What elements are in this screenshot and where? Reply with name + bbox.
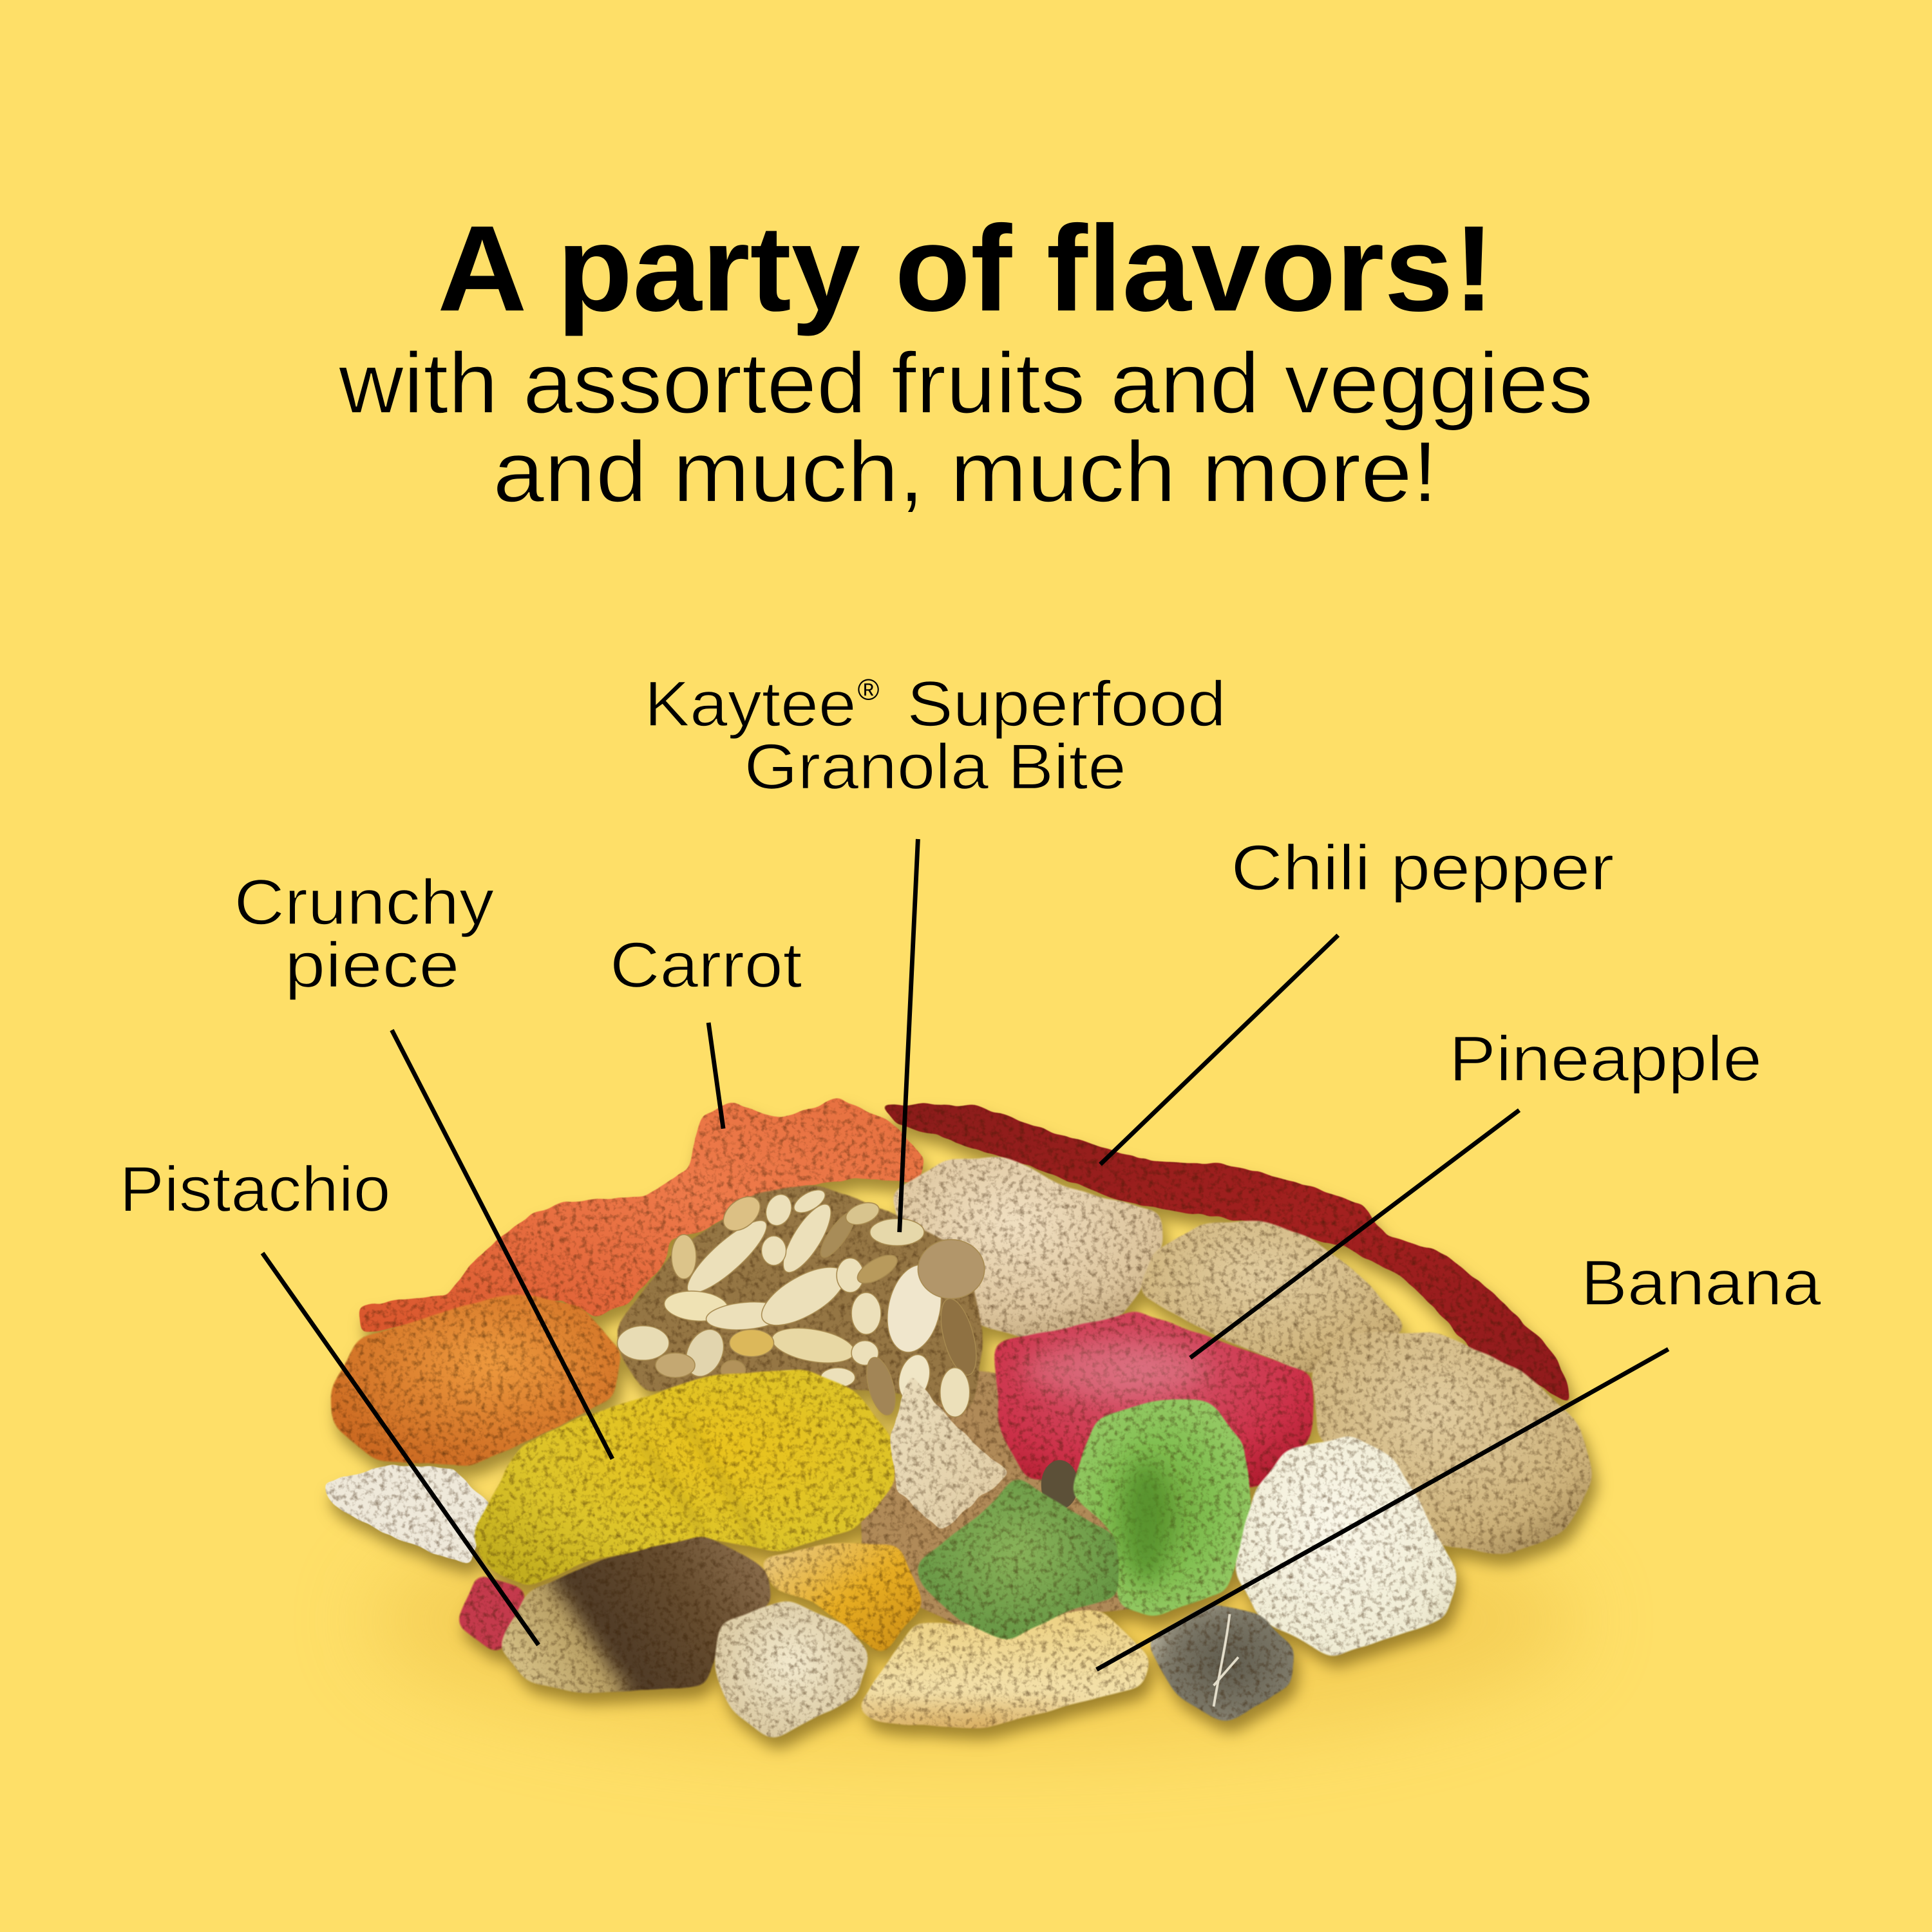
beige nut top (889, 1158, 1163, 1338)
label: carrot: Carrot (610, 930, 802, 1001)
pistachio (499, 1535, 773, 1693)
green ring body (1071, 1399, 1252, 1616)
white shell left (324, 1465, 490, 1565)
food pile illustration (324, 1099, 1593, 1750)
granola seeds (618, 1185, 985, 1418)
corn kernel (759, 1544, 924, 1655)
leader: pineapple (1190, 1110, 1519, 1358)
banana chip (857, 1609, 1151, 1727)
subtitle line 1: with assorted fruits and veggies (338, 336, 1593, 431)
label: banana: Banana (1581, 1247, 1822, 1319)
white yogurt piece (1235, 1435, 1457, 1657)
carrot (360, 1099, 924, 1333)
green crunchy piece (916, 1476, 1117, 1641)
label: granola bite: Granola Bite (744, 731, 1126, 802)
food pieces (324, 1099, 1593, 1740)
crunchy body (473, 1370, 895, 1587)
label: granola bite: ® (858, 673, 880, 706)
seed body (1147, 1603, 1294, 1723)
label: crunchy piece: piece (285, 930, 460, 1001)
label: pineapple: Pineapple (1449, 1023, 1762, 1095)
granola base (616, 1184, 982, 1411)
small red piece (456, 1573, 529, 1655)
granola bite (616, 1184, 985, 1418)
leader: pistachio (263, 1253, 538, 1645)
label: granola bite: Superfood (907, 668, 1226, 740)
pineapple frosted patch (1023, 1343, 1208, 1397)
pineapple body (996, 1311, 1311, 1487)
chili pepper (881, 1105, 1573, 1405)
orange puff (330, 1294, 621, 1465)
striped seed (1147, 1603, 1294, 1723)
round nut bottom (714, 1600, 869, 1740)
ground shadow (370, 1491, 1577, 1750)
title: A party of flavors! (437, 201, 1495, 337)
leader lines (263, 839, 1669, 1669)
leader: carrot (708, 1023, 723, 1129)
callout labels (120, 668, 1822, 1319)
leader: banana (1097, 1349, 1669, 1669)
peanut right (1311, 1333, 1593, 1555)
label: granola bite (645, 668, 1226, 802)
peanut upper right (1139, 1221, 1407, 1374)
dark seed behind green (1041, 1460, 1078, 1510)
pineapple (996, 1311, 1311, 1487)
label: chili pepper: Chili pepper (1231, 832, 1614, 904)
seed markings (1214, 1614, 1238, 1707)
green ring hollow (1121, 1460, 1171, 1584)
heading block (338, 201, 1593, 520)
label: granola bite: Kaytee (645, 668, 857, 740)
leader: chili pepper (1101, 935, 1338, 1164)
label: crunchy piece: Crunchy (234, 867, 495, 938)
leader: crunchy piece (392, 1030, 612, 1459)
label: crunchy piece (234, 867, 495, 1001)
label: pistachio: Pistachio (120, 1154, 391, 1226)
interior backing (862, 1368, 1232, 1627)
crunchy yellow piece (473, 1370, 895, 1587)
green ring (1071, 1399, 1252, 1616)
triangle chip (889, 1374, 1008, 1530)
leader: granola bite (900, 839, 918, 1232)
crunchy folds (641, 1417, 758, 1550)
subtitle line 2: and much, much more! (493, 424, 1438, 520)
